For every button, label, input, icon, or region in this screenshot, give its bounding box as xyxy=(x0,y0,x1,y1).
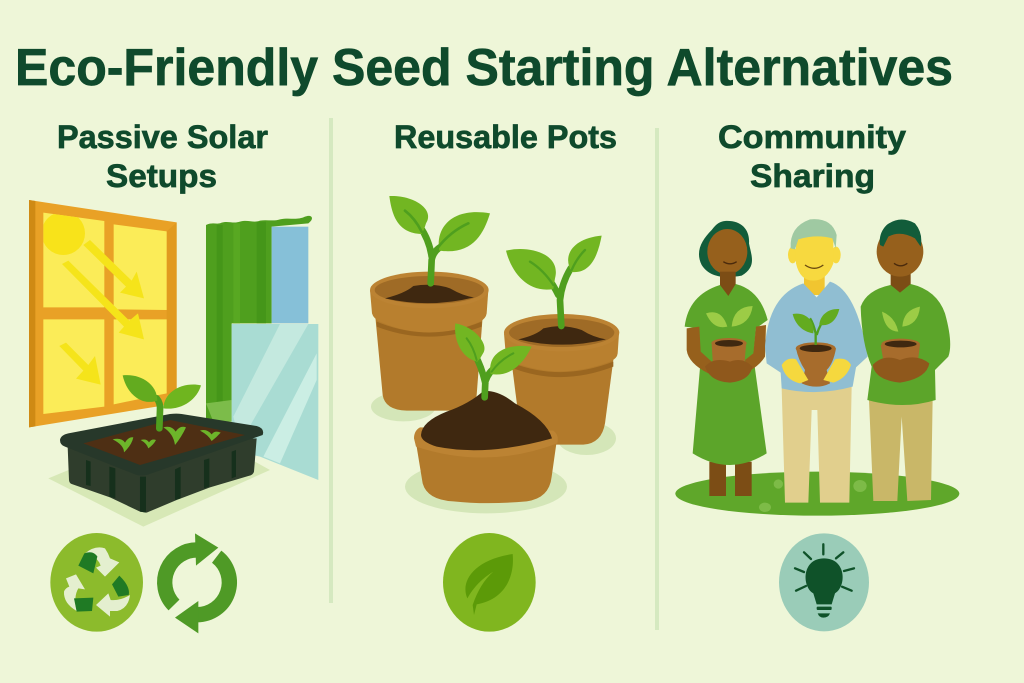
tall seedling xyxy=(123,375,201,428)
back right pot xyxy=(504,314,619,445)
tray shadow xyxy=(48,453,270,527)
illustration: reusable pots with seedlings xyxy=(370,196,619,513)
grass ground xyxy=(675,472,959,516)
heading: community sharing xyxy=(718,119,906,194)
pot shadows xyxy=(371,392,616,513)
illustration: community members holding potted plants xyxy=(675,219,959,516)
heading: reusable pots: Reusable Pots xyxy=(394,119,617,155)
seedling, front pot xyxy=(455,323,532,397)
title: Eco-Friendly Seed Starting Alternatives xyxy=(15,39,953,97)
glass panel xyxy=(232,324,318,480)
small sprouts xyxy=(113,427,221,452)
person: woman in green dress xyxy=(685,221,768,496)
seedling, back left pot xyxy=(389,196,490,283)
icon: refresh arrows xyxy=(165,533,229,633)
heading: passive solar setups: Setups xyxy=(106,158,217,194)
person: man in green shirt xyxy=(861,220,950,501)
icon: leaf badge xyxy=(443,533,536,632)
illustration: passive solar window and seed tray xyxy=(29,200,318,527)
person: man in blue sweater xyxy=(765,219,868,503)
heading: passive solar setups xyxy=(57,119,268,194)
icon: recycling symbol xyxy=(50,533,143,632)
window xyxy=(29,200,177,427)
back left pot xyxy=(370,272,489,411)
seedling, back right pot xyxy=(506,236,602,326)
icon: light bulb badge xyxy=(779,533,869,631)
heading: community sharing: Sharing xyxy=(750,158,875,194)
curtain xyxy=(206,216,312,422)
seed tray xyxy=(60,414,263,513)
heading: passive solar setups: Passive Solar xyxy=(57,119,268,155)
blue sky window xyxy=(272,227,308,323)
heading: community sharing: Community xyxy=(718,119,906,155)
front bowl pot xyxy=(414,391,558,503)
